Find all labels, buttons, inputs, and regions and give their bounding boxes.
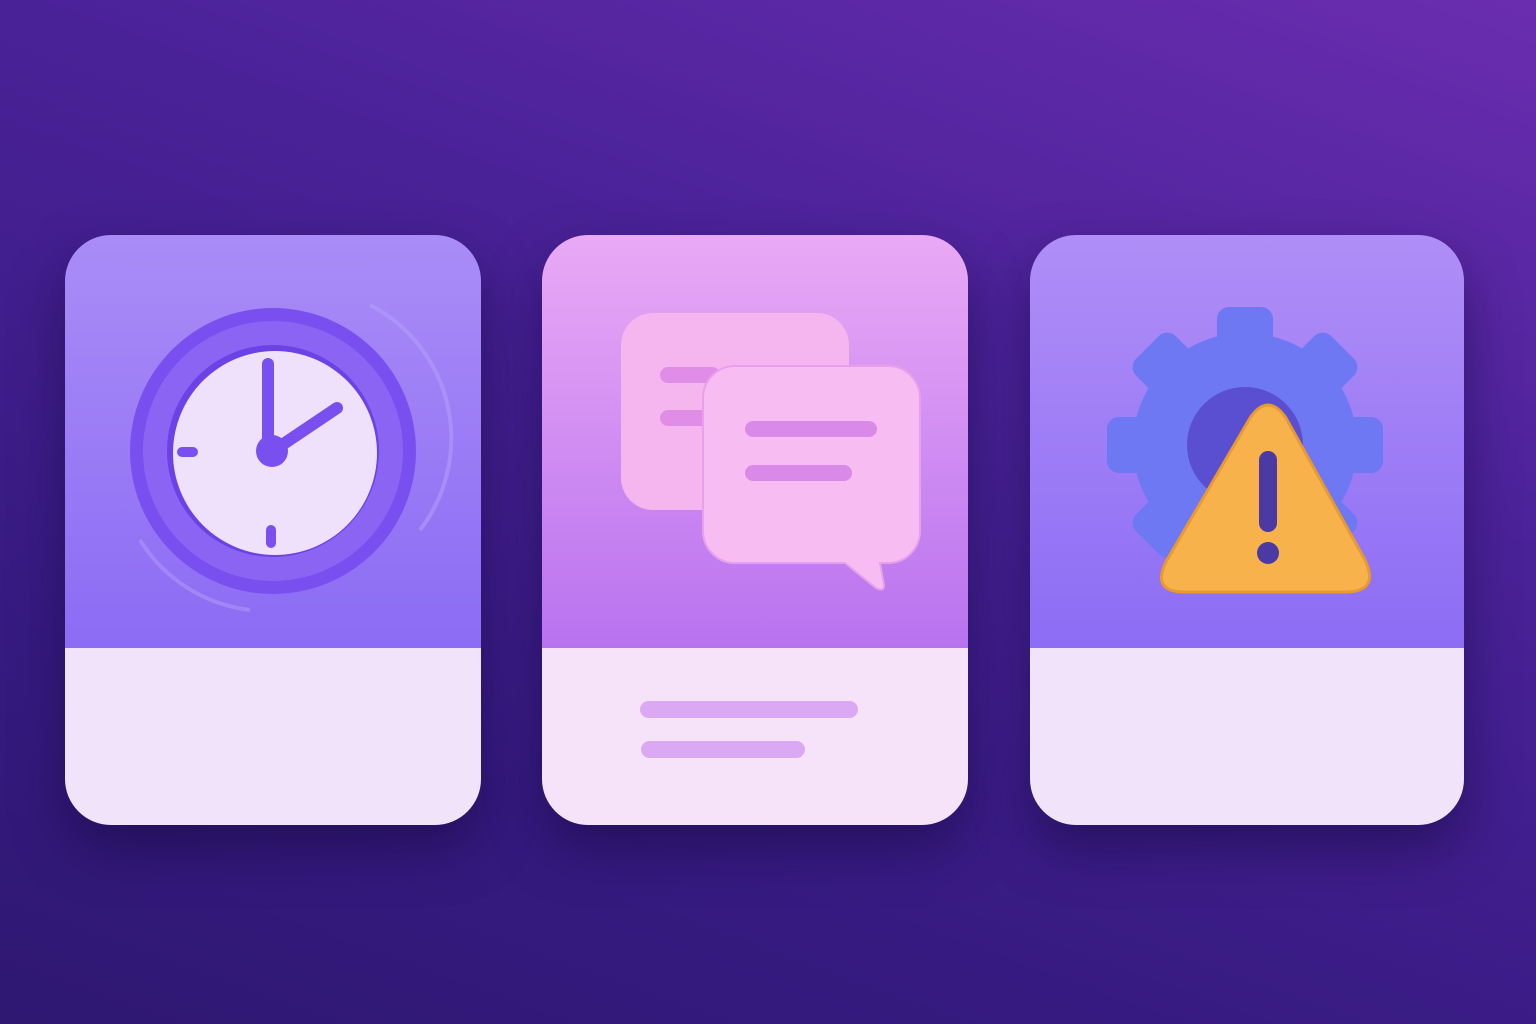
panel: warning card [1030,235,1464,825]
panel: clock card [65,235,481,825]
icon: gear with warning [1107,307,1383,592]
panel: chat card [542,235,968,825]
text bars [640,701,858,758]
icon: clock [130,305,451,610]
icon: chat bubbles [621,313,920,589]
